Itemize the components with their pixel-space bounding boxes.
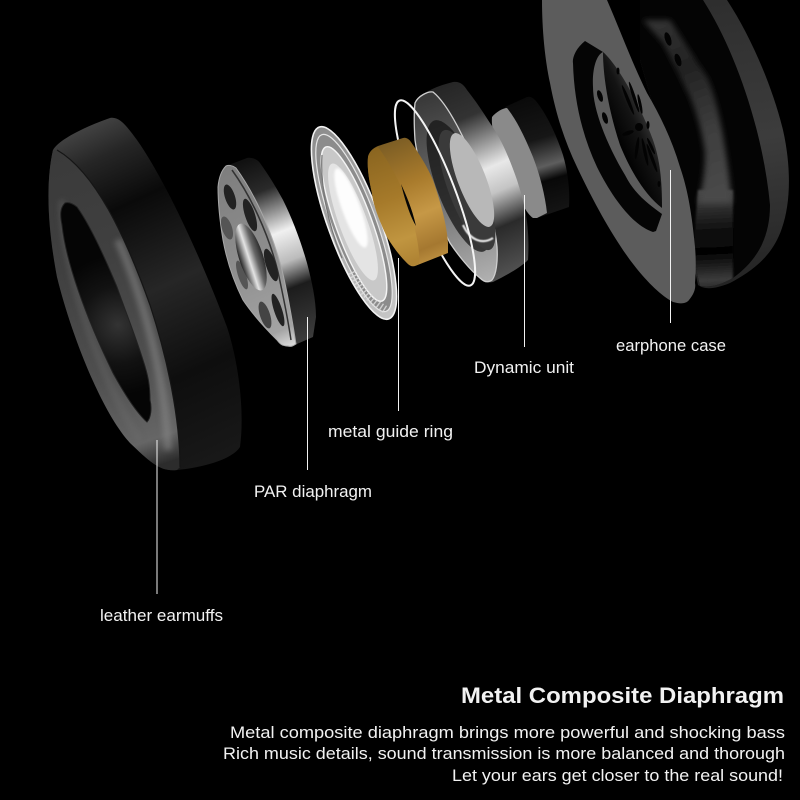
callout line: metal guide ring <box>398 258 399 411</box>
dynamic unit: rear magnet <box>492 97 569 218</box>
case vent dots <box>663 31 683 67</box>
label: earphone case: earphone case <box>616 337 726 355</box>
callout line: earphone case <box>670 170 671 323</box>
leather earmuffs <box>48 118 242 470</box>
description text: Metal composite diaphragm brings more powerful and shocking bass <box>230 723 785 742</box>
plate perforations <box>219 183 287 330</box>
label: metal guide ring: metal guide ring <box>328 423 453 441</box>
callout line: PAR diaphragm <box>307 317 308 470</box>
dynamic unit: driver <box>413 82 528 282</box>
label: PAR diaphragm: PAR diaphragm <box>254 483 372 501</box>
heading: Metal Composite Diaphragm <box>461 683 784 708</box>
case hub slots <box>596 68 660 187</box>
description text: Let your ears get closer to the real sound! <box>452 766 783 785</box>
metal guide ring: thin white loop <box>381 93 489 293</box>
metal guide ring: gold band <box>368 138 448 266</box>
description text <box>223 723 785 785</box>
PAR diaphragm <box>295 118 413 328</box>
callout line: leather earmuffs <box>156 440 158 594</box>
PAR metal plate <box>218 158 316 347</box>
earphone case <box>542 0 789 303</box>
exploded headphone illustration <box>48 0 789 470</box>
label: Dynamic unit: Dynamic unit <box>474 359 574 377</box>
description text: Rich music details, sound transmission is more balanced and thorough <box>223 744 785 763</box>
callout line: Dynamic unit <box>524 195 525 347</box>
label: leather earmuffs: leather earmuffs <box>100 607 223 625</box>
